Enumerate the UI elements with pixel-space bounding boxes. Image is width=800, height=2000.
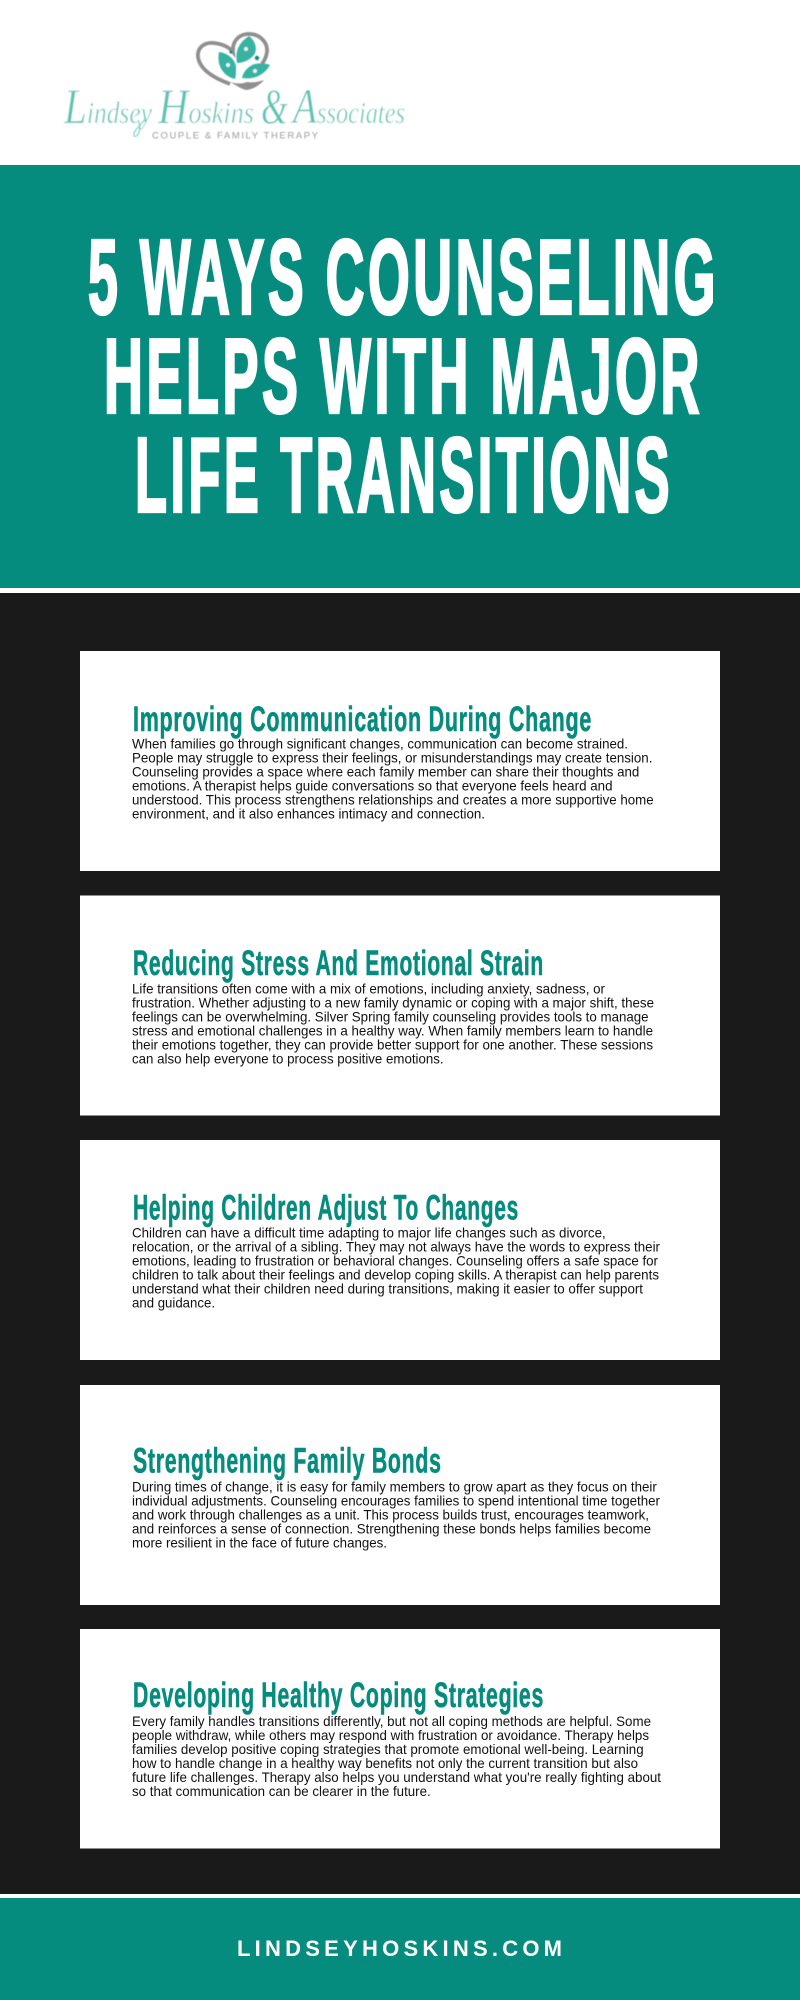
heading: Reducing Stress And Emotional Strain xyxy=(133,944,544,983)
logo wordmark xyxy=(63,78,405,136)
panel: helping children xyxy=(80,1140,720,1360)
body text: Children can have a difficult time adapting to major life changes such as divorce, xyxy=(132,1224,606,1240)
body text: future life challenges. Therapy also helps you understand what you're really fighting about xyxy=(132,1769,661,1785)
heading: Developing Healthy Coping Strategies xyxy=(133,1676,544,1715)
body text: individual adjustments. Counseling encourages families to spend intentional time together xyxy=(132,1492,660,1508)
body text: emotions, leading to frustration or behavioral changes. Counseling offers a safe space for xyxy=(132,1252,658,1268)
body text: Life transitions often come with a mix of emotions, including anxiety, sadness, or xyxy=(132,980,605,996)
body text: frustration. Whether adjusting to a new family dynamic or coping with a major shift, these xyxy=(132,994,654,1010)
heading: Helping Children Adjust To Changes xyxy=(133,1188,519,1228)
title band xyxy=(0,165,800,593)
header band with logo xyxy=(0,0,800,165)
body text: their emotions together, they can provide better support for one another. These sessions xyxy=(132,1036,653,1052)
panel: improving communication xyxy=(80,651,720,871)
logo wordmark: Hoskins xyxy=(157,78,254,134)
body text: understand what their children need during transitions, making it easier to offer support xyxy=(132,1280,643,1296)
body text: and work through challenges as a unit. This process builds trust, encourages teamwork, xyxy=(132,1506,649,1522)
body text: People may struggle to express their feelings, or misunderstandings may create tension. xyxy=(132,750,652,766)
body text xyxy=(132,980,654,1066)
logo wordmark: Associates xyxy=(291,78,405,134)
body text: and guidance. xyxy=(132,1294,215,1310)
body text: more resilient in the face of future changes. xyxy=(132,1534,387,1550)
body text: environment, and it also enhances intimacy and connection. xyxy=(132,806,485,822)
panel: reducing stress xyxy=(80,896,720,1116)
body text: and reinforces a sense of connection. Strengthening these bonds helps families become xyxy=(132,1520,651,1536)
body text xyxy=(132,1713,661,1799)
footer url: LINDSEYHOSKINS.COM xyxy=(237,1936,562,1961)
body text: can also help everyone to process positive emotions. xyxy=(132,1050,444,1066)
body text: During times of change, it is easy for family members to grow apart as they focus on their xyxy=(132,1478,657,1494)
body text: understood. This process strengthens relationships and creates a more supportive home xyxy=(132,792,654,808)
logo xyxy=(63,34,405,142)
footer band xyxy=(0,1894,800,2000)
body text: Every family handles transitions differently, but not all coping methods are helpful. Some xyxy=(132,1713,651,1729)
body text: families develop positive coping strategies that promote emotional well-being. Learning xyxy=(132,1741,644,1757)
body text: children to talk about their feelings and develop coping skills. A therapist can help parents xyxy=(132,1266,659,1282)
body text: emotions. A therapist helps guide conversations so that everyone feels heard and xyxy=(132,778,612,794)
logo tagline: COUPLE & FAMILY THERAPY xyxy=(152,130,319,142)
logo wordmark: Lindsey xyxy=(63,78,152,134)
body text: When families go through significant changes, communication can become strained. xyxy=(132,736,628,752)
body text: Counseling provides a space where each family member can share their thoughts and xyxy=(132,764,639,780)
title xyxy=(88,218,719,534)
body text: people withdraw, while others may respond with frustration or avoidance. Therapy helps xyxy=(132,1727,649,1743)
icon: heart with leaves xyxy=(198,34,270,90)
panel: developing coping strategies xyxy=(80,1629,720,1848)
body text: so that communication can be clearer in the future. xyxy=(132,1783,431,1799)
panel: strengthening family bonds xyxy=(80,1385,720,1605)
logo wordmark: & xyxy=(261,78,288,134)
body text xyxy=(132,1224,660,1310)
body text: feelings can be overwhelming. Silver Spring family counseling provides tools to manage xyxy=(132,1008,649,1024)
body text: stress and emotional challenges in a healthy way. When family members learn to handle xyxy=(132,1022,653,1038)
body text xyxy=(132,736,654,822)
body text xyxy=(132,1478,660,1550)
heading: Strengthening Family Bonds xyxy=(133,1442,442,1480)
body text: how to handle change in a healthy way benefits not only the current transition but also xyxy=(132,1755,638,1771)
body text: relocation, or the arrival of a sibling. They may not always have the words to express their xyxy=(132,1238,660,1254)
